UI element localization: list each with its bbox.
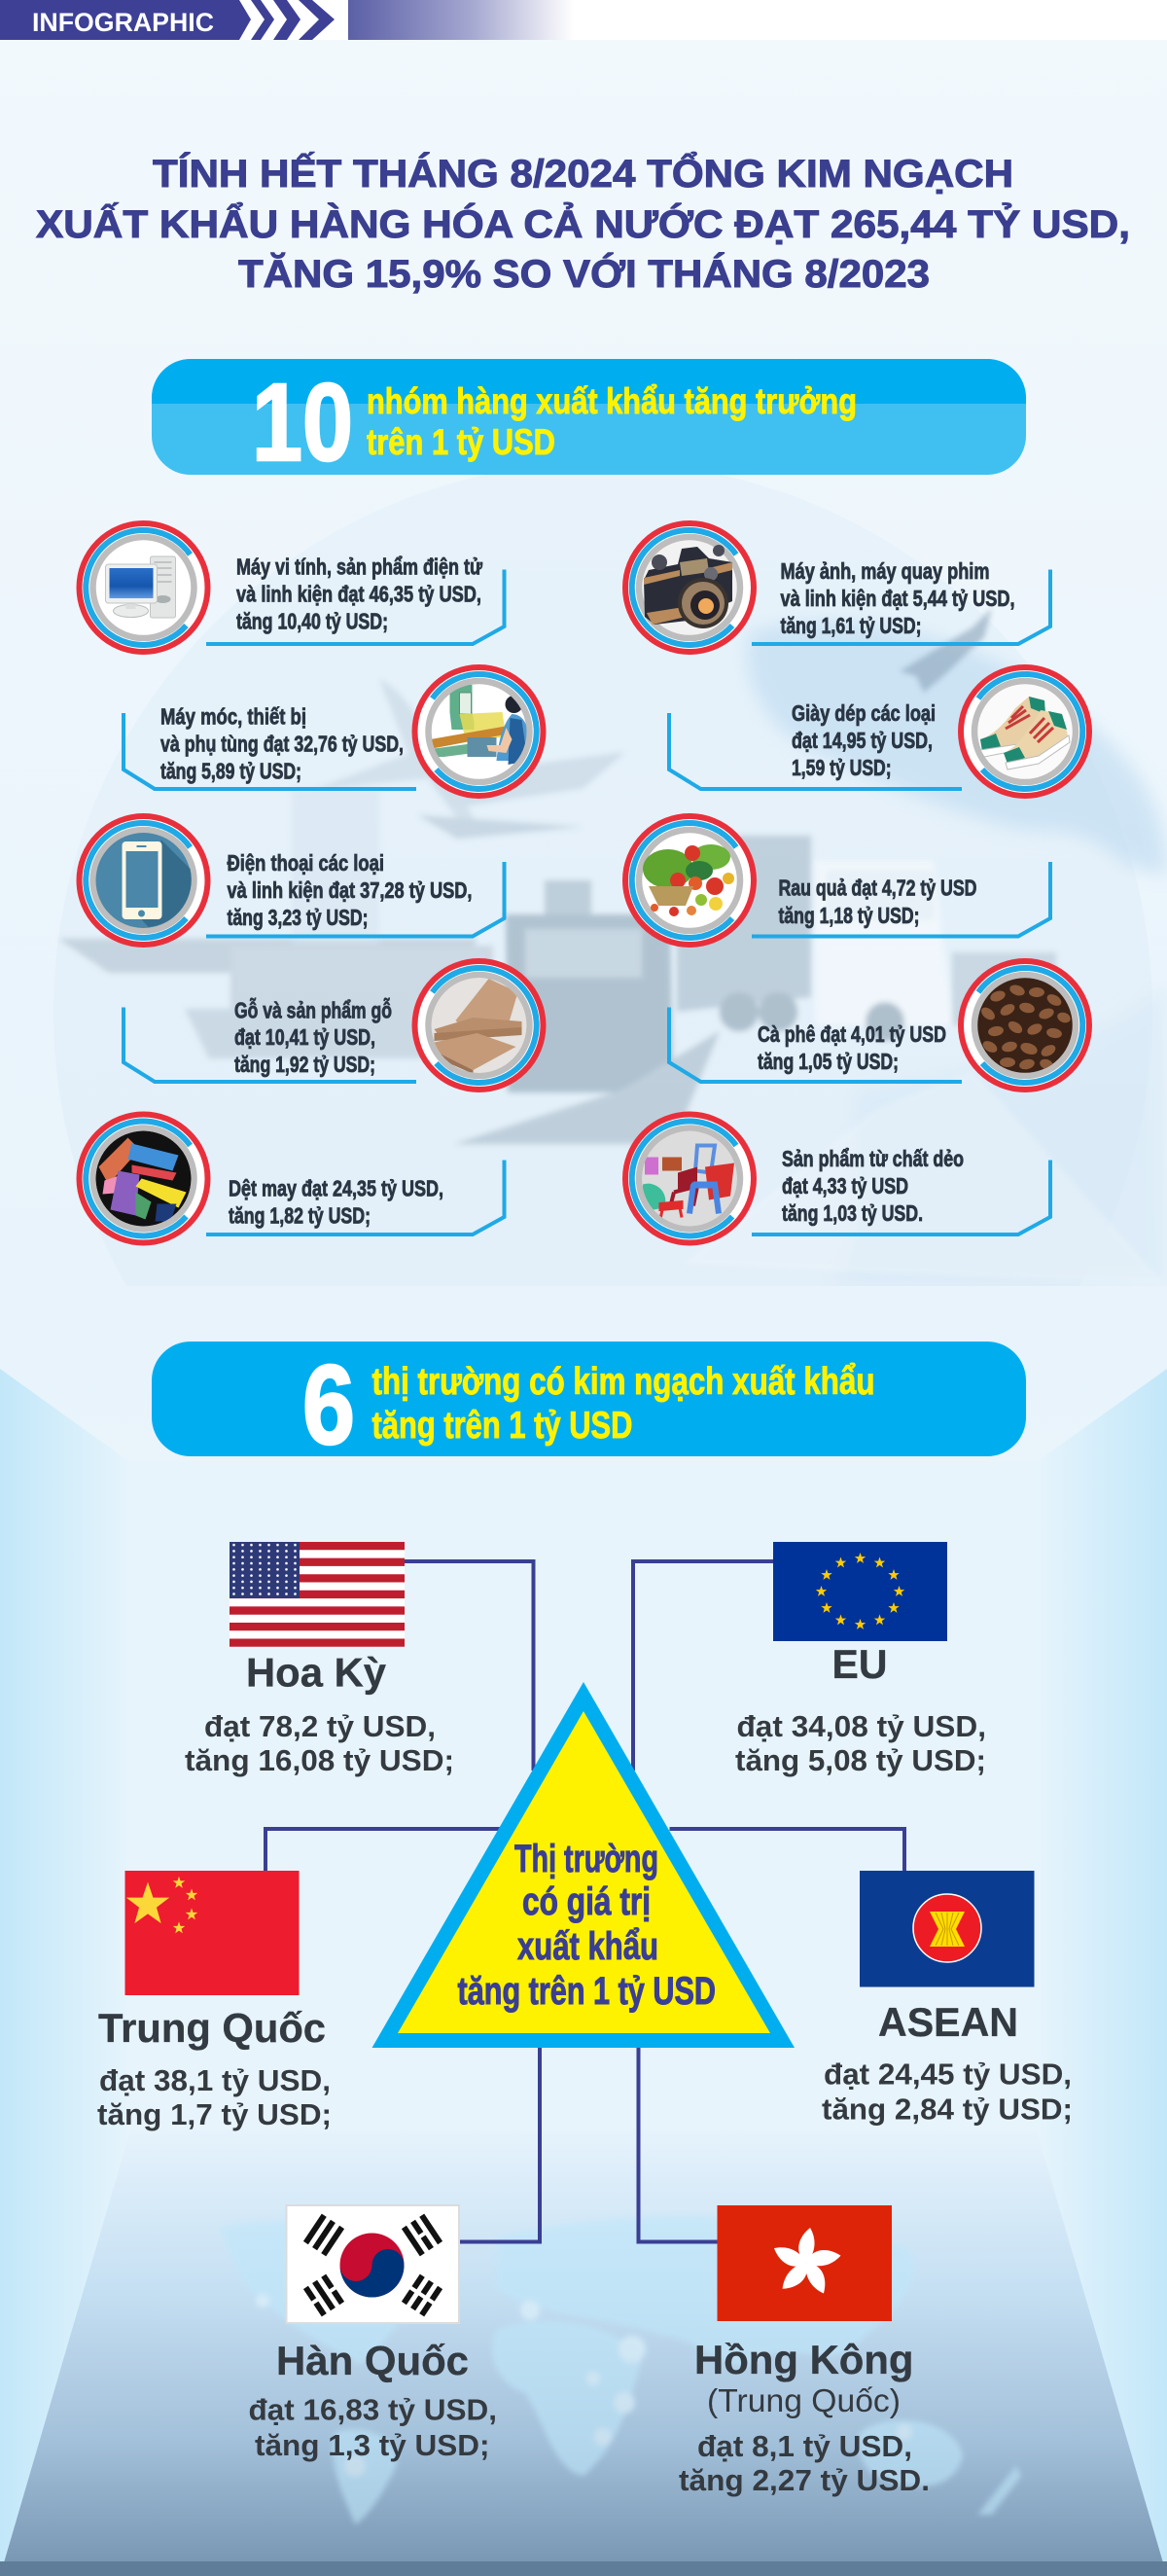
central triangle: xuất khẩu — [517, 1925, 658, 1968]
market: ASEAN: tăng 2,84 tỷ USD; — [822, 2092, 1073, 2127]
text: computers: tăng 10,40 tỷ USD; — [236, 609, 388, 634]
market: Hoa Kỳ: tăng 16,08 tỷ USD; — [185, 1743, 454, 1777]
text: cameras: tăng 1,61 tỷ USD; — [780, 613, 922, 638]
text: computers: Máy vi tính, sản phẩm điện tử — [236, 555, 482, 580]
text: coffee — [758, 1021, 946, 1074]
banner: 6 markets: tăng trên 1 tỷ USD — [371, 1405, 632, 1447]
flag: EU — [773, 1542, 947, 1641]
market: ASEAN: ASEAN — [878, 1999, 1018, 2045]
banner: 6 markets — [152, 1342, 1026, 1468]
text: machinery: Máy móc, thiết bị — [160, 704, 306, 730]
market: EU: EU — [832, 1641, 887, 1687]
market: Trung Quốc: tăng 1,7 tỷ USD; — [97, 2097, 332, 2131]
gradient bar — [348, 0, 574, 40]
text: plastics — [782, 1146, 964, 1226]
market: ASEAN: đạt 24,45 tỷ USD, — [824, 2057, 1072, 2092]
text: wood: tăng 1,92 tỷ USD; — [234, 1052, 375, 1077]
market: Hồng Kông: đạt 8,1 tỷ USD, — [697, 2429, 912, 2463]
floor — [0, 2130, 1167, 2576]
text: computers — [236, 555, 482, 634]
icon: sneakers — [961, 667, 1089, 796]
text: computers: và linh kiện đạt 46,35 tỷ USD, — [236, 582, 481, 607]
text: phones: Điện thoại các loại — [228, 850, 384, 876]
market: Hàn Quốc: Hàn Quốc — [276, 2338, 469, 2383]
banner: 10 product groups: 10 — [252, 361, 353, 483]
market: EU — [735, 1542, 986, 1777]
banner: 10 product groups: trên 1 tỷ USD — [367, 422, 555, 462]
flag: South Korea — [286, 2205, 459, 2323]
market: Hồng Kông — [679, 2205, 930, 2497]
banner: 6 markets: 6 — [302, 1342, 355, 1468]
connector lines — [265, 1561, 904, 2241]
item: plastics — [625, 1115, 1050, 1243]
title — [36, 150, 1130, 296]
text: footwear — [792, 700, 936, 780]
text: cameras: và linh kiện đạt 5,44 tỷ USD, — [780, 586, 1015, 611]
icon: camera — [625, 523, 754, 652]
item: wood — [124, 961, 543, 1090]
text: coffee: Cà phê đạt 4,01 tỷ USD — [758, 1021, 946, 1047]
title: TĂNG 15,9% SO VỚI THÁNG 8/2023 — [238, 251, 930, 296]
icon: wood boards — [414, 961, 543, 1090]
text: wood: Gỗ và sản phẩm gỗ — [234, 996, 392, 1023]
market: Hàn Quốc — [249, 2205, 497, 2462]
text: coffee: tăng 1,05 tỷ USD; — [758, 1049, 899, 1074]
tag: INFOGRAPHIC — [0, 0, 251, 40]
icon: machinery — [414, 667, 543, 796]
title: TÍNH HẾT THÁNG 8/2024 TỔNG KIM NGẠCH — [153, 150, 1013, 196]
market: Trung Quốc: Trung Quốc — [98, 2005, 326, 2051]
market: Hàn Quốc: đạt 16,83 tỷ USD, — [249, 2393, 497, 2426]
text: wood — [234, 996, 392, 1077]
text: footwear: đạt 14,95 tỷ USD, — [792, 728, 933, 753]
market: Hoa Kỳ: Hoa Kỳ — [246, 1650, 387, 1695]
item: cameras — [625, 523, 1050, 652]
market: Hoa Kỳ: đạt 78,2 tỷ USD, — [204, 1709, 436, 1743]
text: cameras: Máy ảnh, máy quay phim — [780, 558, 990, 584]
market: EU: tăng 5,08 tỷ USD; — [735, 1743, 986, 1777]
market: Hoa Kỳ — [185, 1542, 454, 1777]
text: machinery: và phụ tùng đạt 32,76 tỷ USD, — [160, 732, 404, 757]
item: footwear — [669, 667, 1089, 796]
icon: coffee beans — [961, 961, 1089, 1090]
text: footwear: Giày dép các loại — [792, 700, 936, 726]
market: Hàn Quốc: tăng 1,3 tỷ USD; — [255, 2428, 490, 2462]
flag: Hong Kong — [718, 2205, 892, 2321]
text: machinery: tăng 5,89 tỷ USD; — [160, 759, 301, 784]
text: plastics: đạt 4,33 tỷ USD — [782, 1173, 908, 1199]
central triangle: Thị trường — [514, 1838, 658, 1880]
text: textiles: tăng 1,82 tỷ USD; — [229, 1202, 371, 1228]
market: Hồng Kông: Hồng Kông — [694, 2337, 914, 2382]
central triangle — [371, 1682, 795, 2048]
flag: USA — [230, 1542, 405, 1647]
icon: computer — [80, 523, 208, 652]
market: ASEAN — [822, 1871, 1073, 2127]
item: computers — [80, 523, 504, 652]
text: plastics: tăng 1,03 tỷ USD. — [782, 1200, 923, 1226]
text: textiles: Dệt may đạt 24,35 tỷ USD, — [229, 1175, 443, 1200]
text: phones — [228, 850, 473, 930]
item: coffee — [669, 961, 1089, 1090]
market: Hồng Kông: tăng 2,27 tỷ USD. — [679, 2463, 930, 2497]
banner: 10 product groups: nhóm hàng xuất khẩu tăng trưởng — [367, 381, 857, 421]
flag: ASEAN — [860, 1871, 1035, 1986]
background photo collage: globe, plane, ship, train, truck — [58, 606, 1167, 1286]
icon: plastic chairs — [625, 1115, 754, 1243]
title: XUẤT KHẨU HÀNG HÓA CẢ NƯỚC ĐẠT 265,44 TỶ USD, — [36, 200, 1130, 246]
item: machinery — [124, 667, 543, 796]
market: Trung Quốc — [97, 1871, 332, 2131]
flag: China — [124, 1871, 300, 1995]
text: vegetables: Rau quả đạt 4,72 tỷ USD — [778, 876, 976, 901]
text: vegetables: tăng 1,18 tỷ USD; — [778, 903, 920, 928]
central triangle: có giá trị — [522, 1880, 651, 1923]
text: cameras — [780, 558, 1015, 638]
side panel right — [1038, 1369, 1167, 2576]
market: EU: đạt 34,08 tỷ USD, — [737, 1709, 986, 1743]
text: vegetables — [778, 876, 976, 928]
text: phones: và linh kiện đạt 37,28 tỷ USD, — [228, 877, 473, 903]
header strip — [0, 0, 1167, 40]
banner: 6 markets: thị trường có kim ngạch xuất khẩu — [371, 1361, 875, 1403]
world map — [219, 2217, 1021, 2524]
label: INFOGRAPHIC: INFOGRAPHIC — [32, 8, 214, 37]
text: textiles — [229, 1175, 443, 1228]
item: textiles — [80, 1115, 504, 1243]
text: phones: tăng 3,23 tỷ USD; — [228, 905, 368, 930]
side panel left — [0, 1369, 128, 2576]
market: Trung Quốc: đạt 38,1 tỷ USD, — [99, 2063, 331, 2097]
market: Hồng Kông: (Trung Quốc) — [707, 2382, 901, 2418]
text: wood: đạt 10,41 tỷ USD, — [234, 1024, 375, 1050]
center panel — [128, 1461, 1038, 2142]
item: phones — [80, 816, 504, 945]
icon: textile spools — [80, 1115, 208, 1243]
icon: vegetables — [625, 816, 754, 945]
icon: phone — [80, 816, 208, 945]
banner: 10 product groups — [152, 359, 1026, 483]
text: machinery — [160, 704, 404, 784]
text: footwear: 1,59 tỷ USD; — [792, 755, 892, 780]
text: plastics: Sản phẩm từ chất dẻo — [782, 1146, 964, 1171]
bottom strip — [0, 2561, 1167, 2576]
central triangle: tăng trên 1 tỷ USD — [457, 1970, 716, 2013]
chevrons — [251, 0, 335, 40]
item: vegetables — [625, 816, 1050, 945]
